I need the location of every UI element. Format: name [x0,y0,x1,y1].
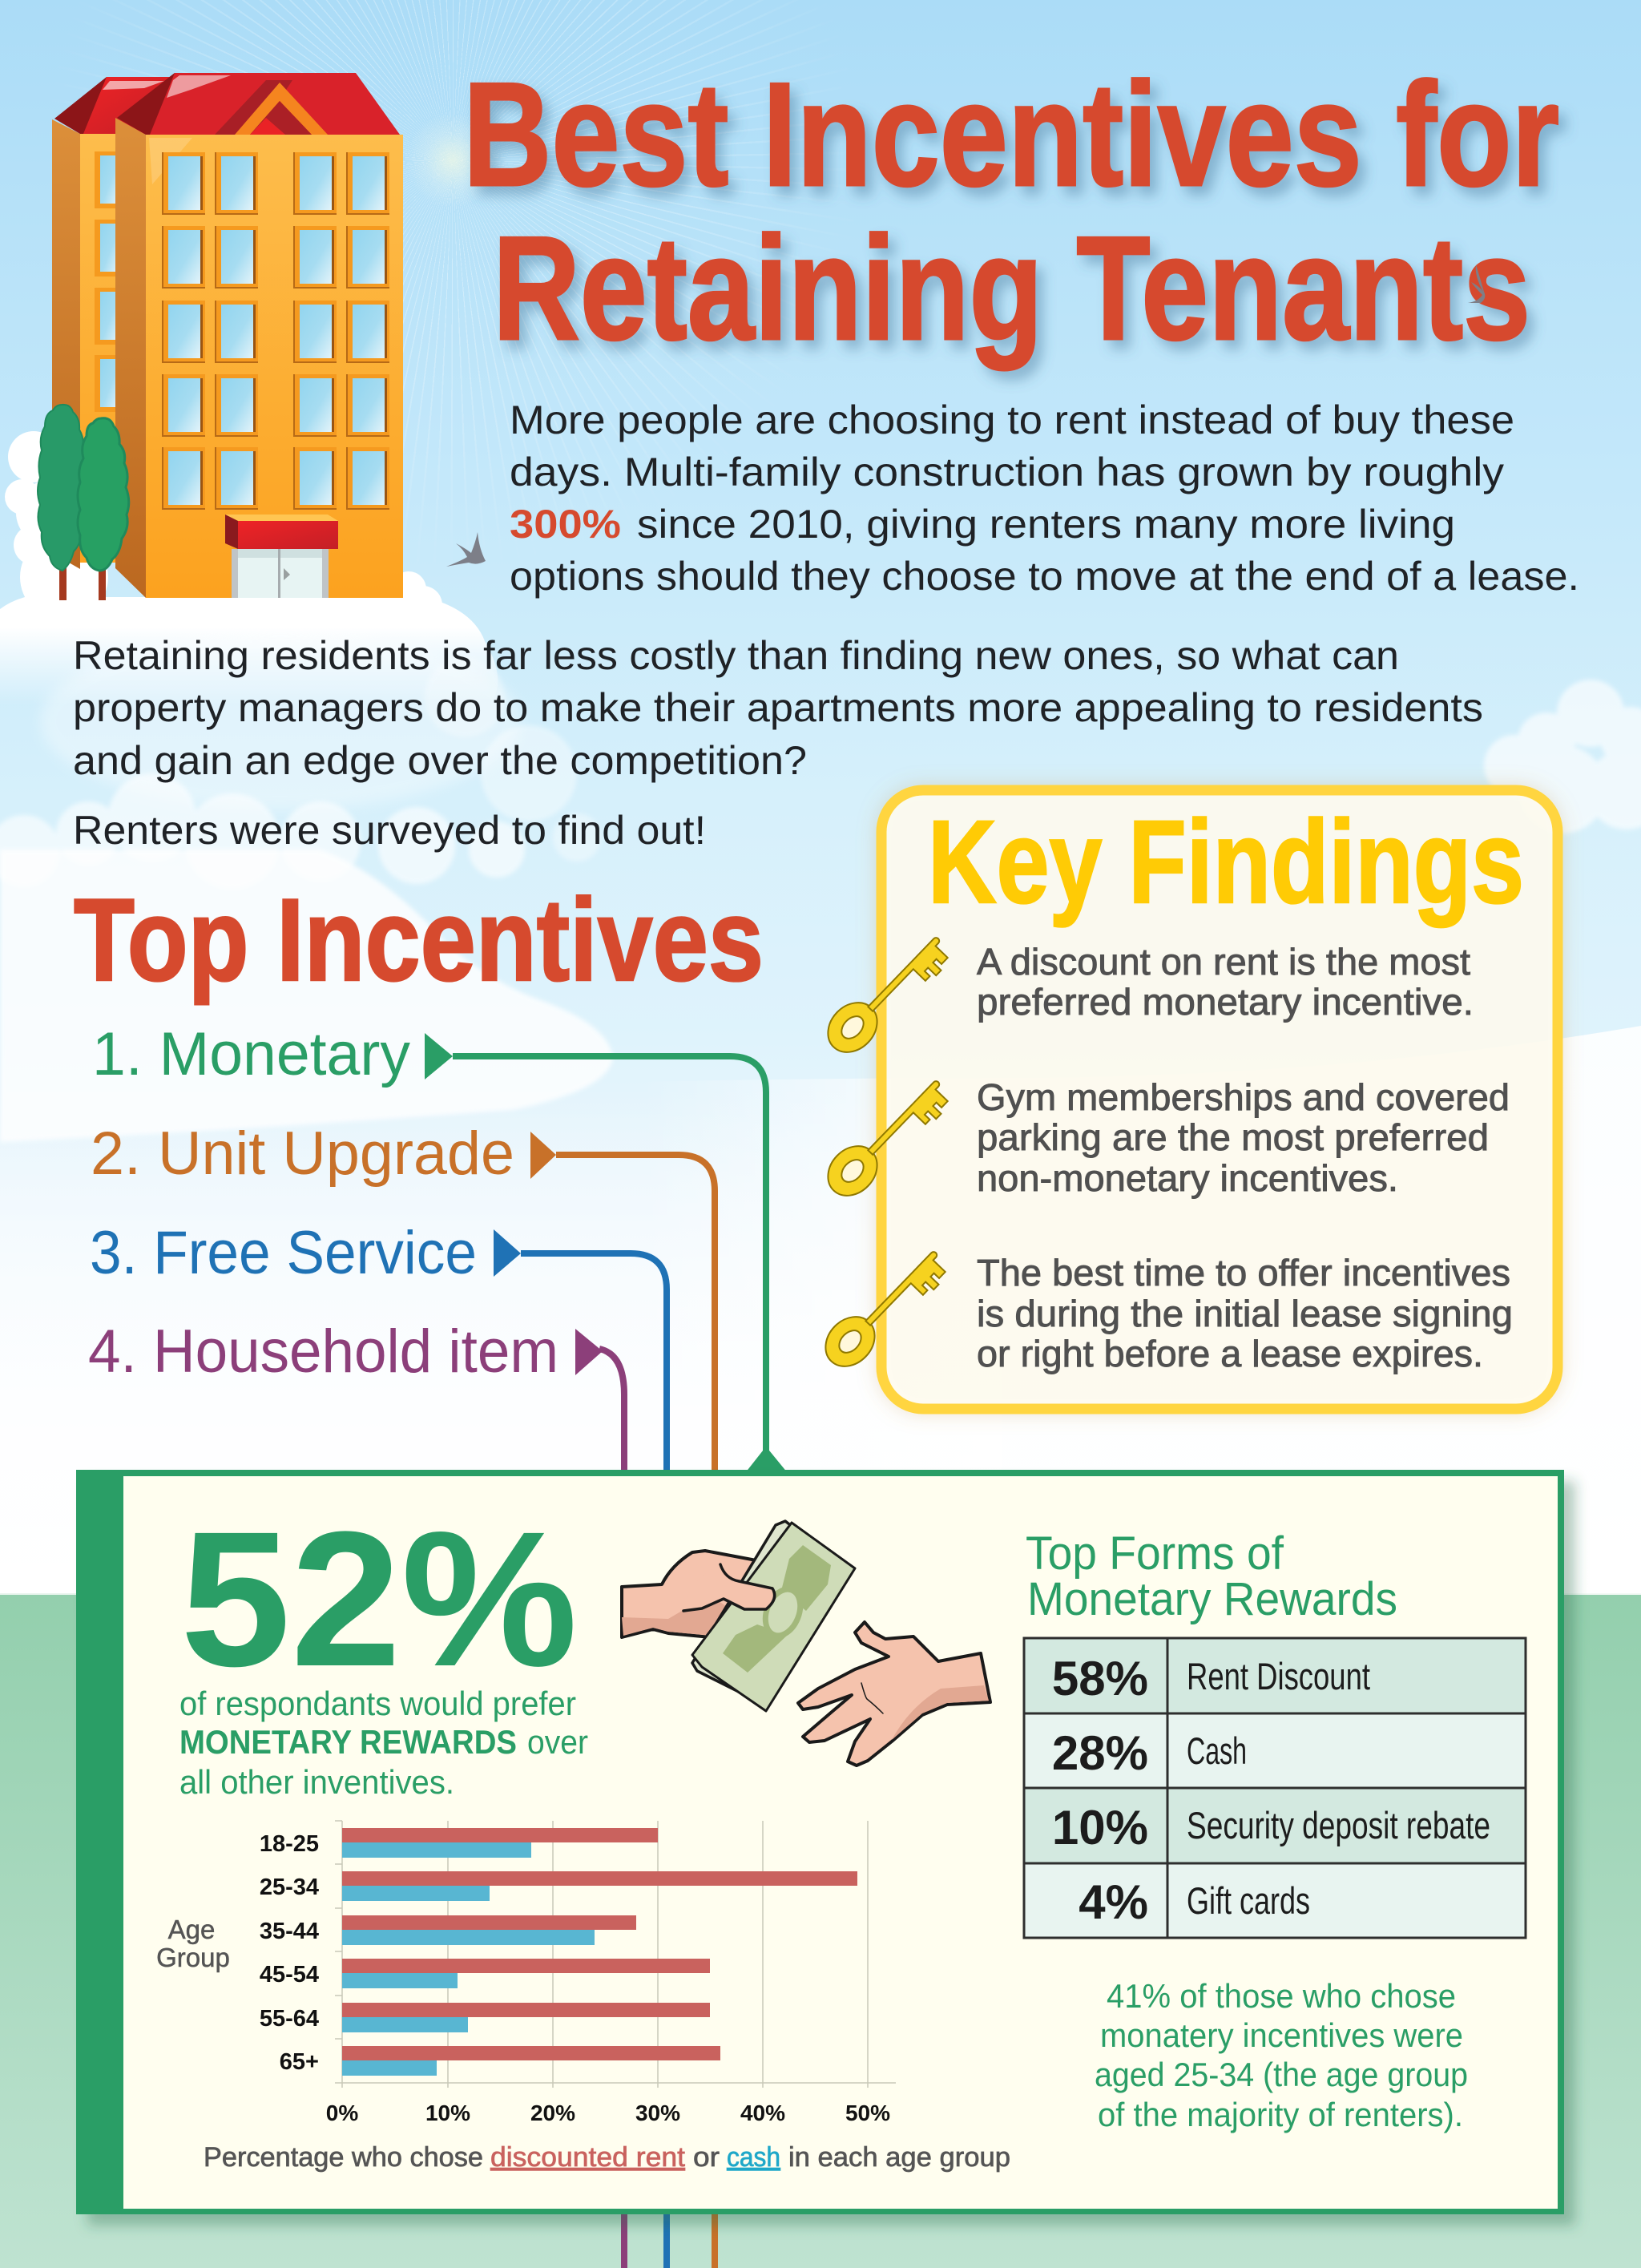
bar chart: age groups: Group [156,1943,230,1972]
second paragraph: Retaining residents is far less costly than finding new ones, so what can [73,633,1399,678]
item 2 unit upgrade [91,1120,715,1471]
panel: key findings [881,790,1558,1409]
item 4 household item [88,1318,624,1471]
table: monetary rewards: 10% [1052,1801,1148,1854]
intro paragraph: days. Multi-family construction has grown by roughly [510,450,1504,494]
finding 2: non-monetary incentives. [977,1157,1398,1199]
chart caption [204,2142,1010,2173]
note: 41% of renters: 41% of those who chose [1107,1977,1456,2015]
intro paragraph: More people are choosing to rent instead of buy these [510,398,1514,442]
entrance door and awning [225,515,338,598]
intro paragraph [510,398,1579,599]
second paragraph [73,633,1483,853]
table: monetary rewards: Rent Discount [1187,1655,1370,1697]
sun glow [405,112,501,208]
bar chart: age groups: 65+ [280,2049,319,2075]
note: 41% of renters: aged 25-34 (the age group [1095,2056,1468,2093]
stat description [179,1685,588,1801]
bar chart: age groups: 30% [635,2101,680,2125]
incentive list and connector lines [88,1020,788,1473]
heading: top forms of monetary rewards [1026,1527,1397,1625]
bar chart: age groups: 35-44 [260,1919,319,1944]
item 2 unit upgrade: 2. Unit Upgrade [91,1120,514,1188]
bar chart: age groups: 40% [740,2101,785,2125]
finding 1: A discount on rent is the most [977,941,1470,983]
building illustration [38,73,403,600]
stat description: all other inventives. [179,1763,454,1801]
heading: top forms of monetary rewards: Top Forms of [1026,1527,1284,1580]
intro paragraph: options should they choose to move at the end of a lease. [510,554,1579,599]
bar chart: age groups: 10% [425,2101,470,2125]
heading: top forms of monetary rewards: Monetary Rewards [1027,1573,1397,1625]
chart caption: discounted rent [490,2142,686,2173]
title [463,51,1559,370]
finding 1 [977,941,1474,1023]
bar chart: age groups: Age [168,1915,215,1944]
bar chart: age groups: 50% [845,2101,890,2125]
item 3 free service: 3. Free Service [90,1219,477,1287]
windows [162,152,389,510]
finding 2: Gym memberships and covered [977,1076,1510,1118]
front building [115,73,403,598]
icon: key 3 [816,1237,954,1378]
finding 3: is during the initial lease signing [977,1293,1513,1334]
sun rays [139,0,769,455]
bar chart: age groups: 45-54 [260,1962,319,1988]
bar chart: age groups: 18-25 [260,1831,319,1857]
finding 1: preferred monetary incentive. [977,981,1474,1023]
table: monetary rewards: 28% [1052,1726,1148,1780]
bird small swallow [446,532,486,567]
finding 2: parking are the most preferred [977,1116,1489,1158]
note: 41% of renters: of the majority of renters). [1098,2096,1463,2133]
heading: top incentives: Top Incentives [74,874,764,1005]
table: monetary rewards: Gift cards [1187,1879,1310,1922]
finding 3: or right before a lease expires. [977,1333,1483,1374]
trees [38,405,129,600]
item 1 monetary: 1. Monetary [92,1020,410,1088]
stat description: over [527,1723,588,1761]
icon: key 1 [818,923,956,1063]
item 1 monetary [92,1020,788,1473]
green ground band [0,1593,1641,2268]
bar chart: age groups: 55-64 [260,2006,319,2032]
back building [52,77,172,569]
table: monetary rewards [1024,1638,1526,1938]
chart caption: Percentage who chose [204,2142,483,2173]
bar chart: age groups [156,1821,1010,2173]
icon: key 2 [818,1067,956,1207]
table: monetary rewards: 58% [1052,1652,1148,1705]
panel: monetary [76,1470,1564,2214]
intro paragraph: since 2010, giving renters many more living [637,502,1455,547]
bar chart: age groups: 25-34 [260,1875,319,1900]
second paragraph: and gain an edge over the competition? [73,738,807,783]
intro paragraph: 300% [510,502,621,547]
table: monetary rewards: Security deposit rebate [1187,1804,1490,1846]
finding 3 [977,1252,1513,1374]
chart caption: or [693,2142,720,2173]
second paragraph: Renters were surveyed to find out! [73,808,706,853]
second paragraph: property managers do to make their apartments more appealing to residents [73,685,1483,730]
chart caption: in each age group [788,2142,1010,2173]
note: 41% of renters: monatery incentives were [1100,2016,1463,2054]
finding 3: The best time to offer incentives [977,1252,1510,1293]
icon: hands exchanging money [622,1521,990,1766]
clouds [0,431,1641,1595]
table: monetary rewards: Cash [1187,1729,1247,1772]
table: monetary rewards: 4% [1079,1875,1148,1929]
item 4 household item: 4. Household item [88,1318,558,1386]
finding 2 [977,1076,1510,1199]
note: 41% of renters [1095,1977,1468,2133]
lines continuing below panel [624,2204,715,2268]
bird over title [1468,264,1485,303]
bar chart: age groups: 20% [530,2101,575,2125]
stat description: of respondants would prefer [179,1685,576,1722]
big stat 52%: 52% [180,1491,578,1706]
stat description: MONETARY REWARDS [179,1723,517,1761]
chart caption: cash [727,2142,780,2173]
bar chart: age groups: 0% [326,2101,358,2125]
item 3 free service [90,1219,667,1471]
